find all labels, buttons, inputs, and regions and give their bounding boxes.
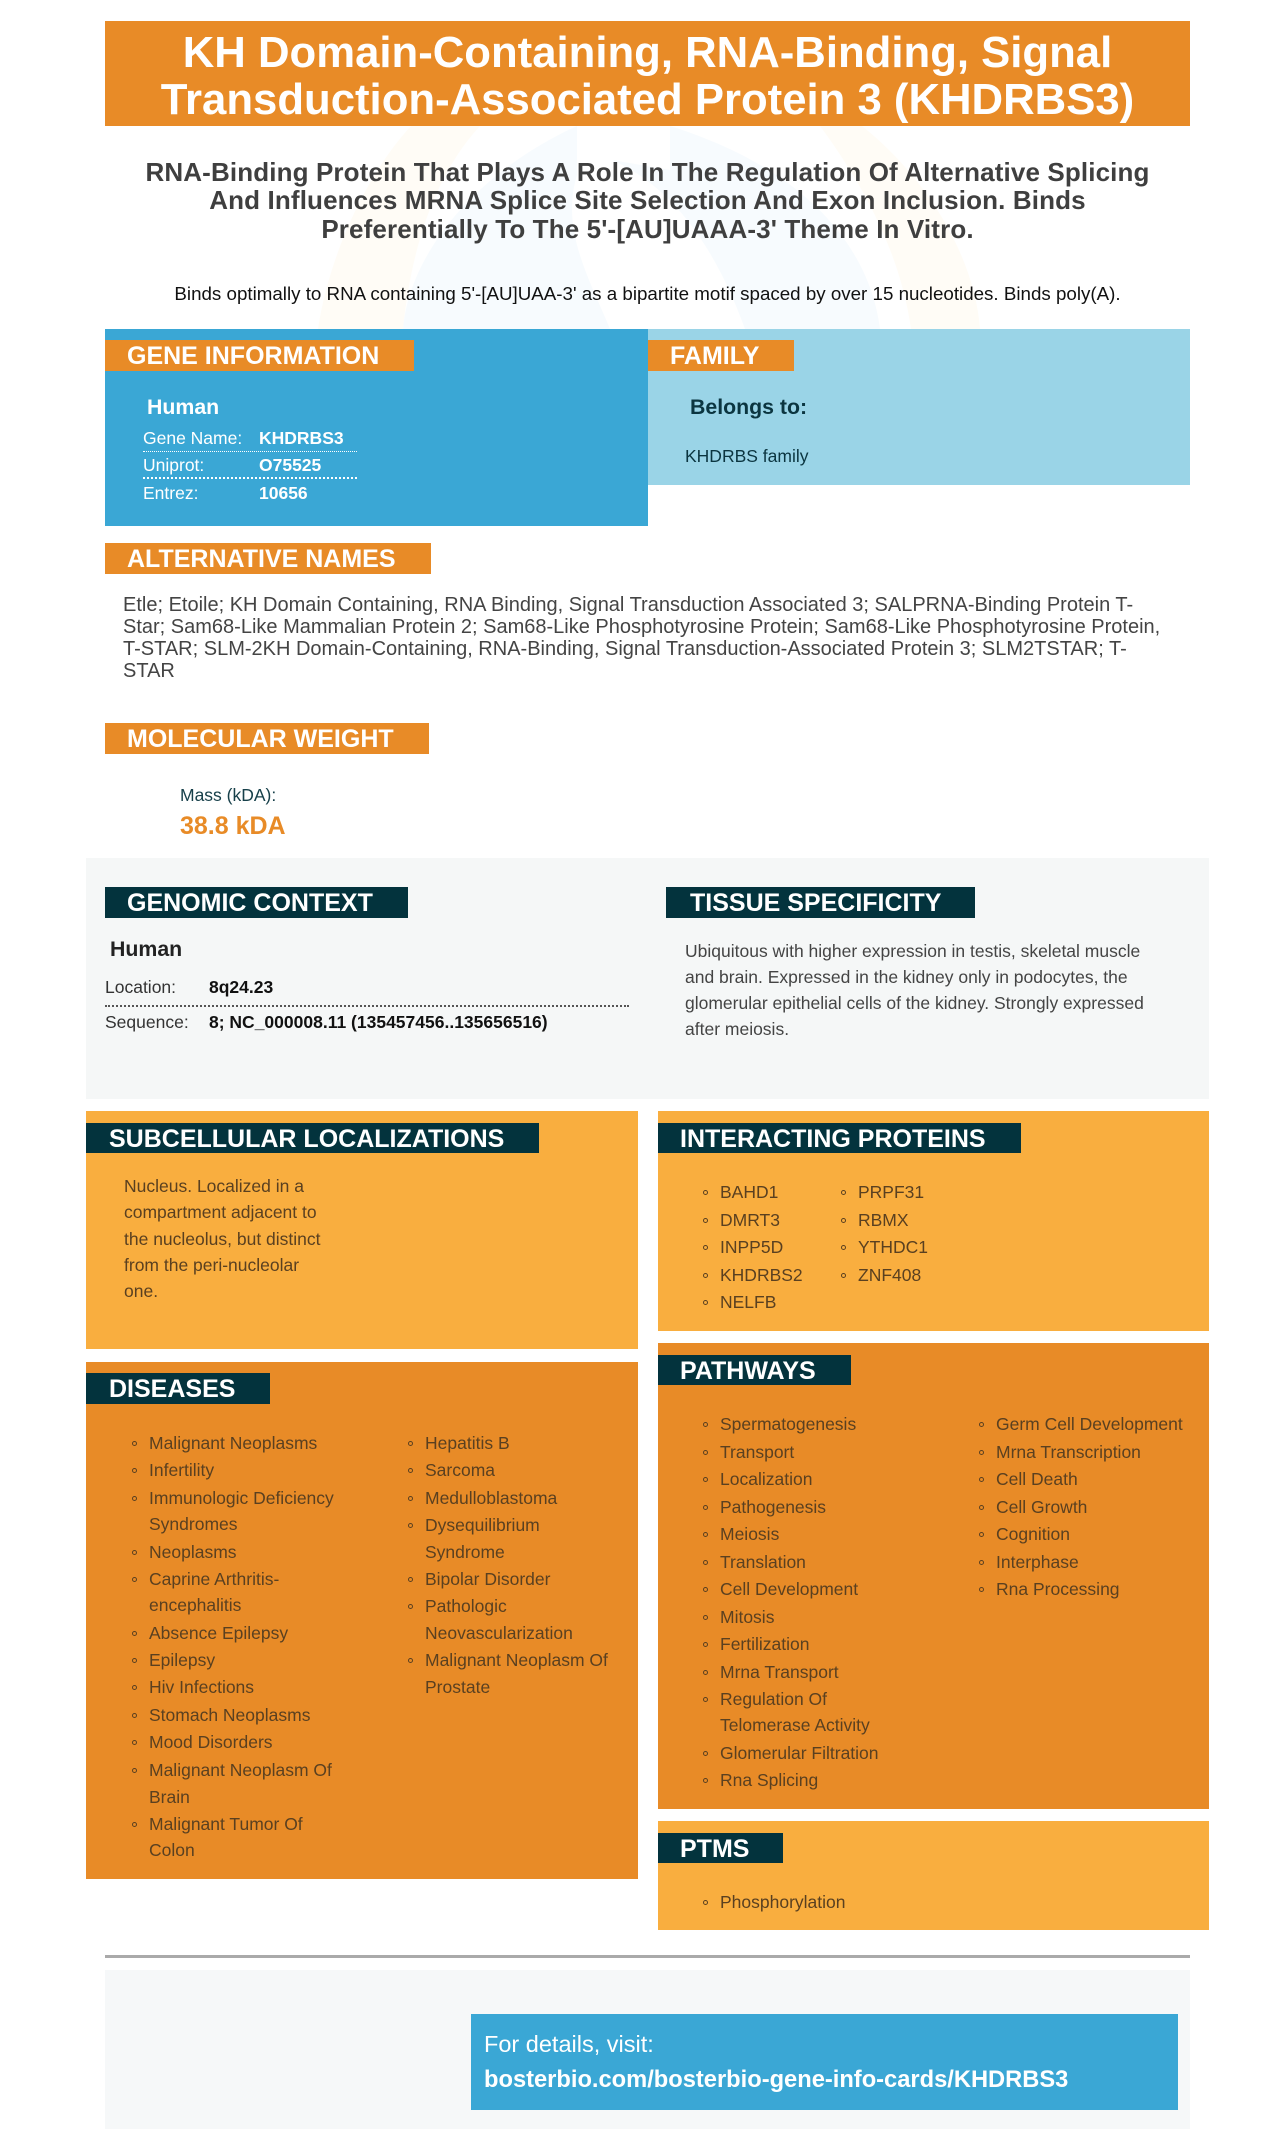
protein list: INPP5D [720,1237,783,1257]
pathway list: Transport [720,1442,794,1462]
heading: alternative names: ALTERNATIVE NAMES [127,545,396,573]
pathway list [703,1414,1183,1790]
description: Binds optimally to RNA containing 5'-[AU]UAA-3' as a bipartite motif spaced by over 15 nucleotides. Binds poly(A). [174,283,1121,304]
disease list: Hiv Infections [149,1677,254,1697]
heading: diseases: DISEASES [109,1375,235,1403]
pathway list: Localization [720,1469,812,1489]
panel: pathways [658,1343,1209,1809]
heading: gene information: GENE INFORMATION [127,342,379,370]
callout url: bosterbio.com/bosterbio-gene-info-cards/KHDRBS3 [484,2067,1068,2093]
pathway list: Fertilization [720,1634,809,1654]
protein list: KHDRBS2 [720,1265,803,1285]
pathway list: Cell Development [720,1579,858,1599]
pathway list: Spermatogenesis [720,1414,856,1434]
tissue specificity text: glomerular epithelial cells of the kidney. Strongly expressed [685,993,1144,1013]
title banner [105,21,1190,126]
disease list: Neoplasms [149,1542,237,1562]
pathway list: Rna Processing [996,1579,1120,1599]
panel: PTMs [658,1821,1209,1930]
alternative names text: Star; Sam68-Like Mammalian Protein 2; Sam68-Like Phosphotyrosine Protein; Sam68-Like Phosphotyrosine Protein, [123,616,1160,638]
panel: diseases [86,1362,638,1879]
panel: gene information [105,329,648,526]
disease list: Neovascularization [425,1623,573,1643]
protein list: NELFB [720,1292,776,1312]
pathway list: Pathogenesis [720,1497,826,1517]
pathway list: Translation [720,1552,806,1572]
heading: family [648,340,794,371]
localization text: the nucleolus, but distinct [124,1229,321,1249]
belongs to label: Belongs to: [690,395,807,419]
species label: Human [110,937,182,961]
background watermark [318,126,980,329]
uniprot row: Uniprot: [143,455,204,475]
uniprot row: O75525 [259,455,321,475]
protein list [703,1182,928,1312]
title line 2: Transduction-Associated Protein 3 (KHDRBS3) [161,75,1134,124]
callout label: For details, visit: [484,2031,654,2057]
tissue specificity text [685,941,1144,1039]
protein list: RBMX [858,1210,909,1230]
alternative names text: T-STAR; SLM-2KH Domain-Containing, RNA-Binding, Signal Transduction-Associated Protein 3; SLM2TSTAR; T- [123,638,1127,660]
tissue specificity text: after meiosis. [685,1019,789,1039]
heading: molecular weight: MOLECULAR WEIGHT [127,725,394,753]
location row: Location: [105,977,176,997]
PTM list: Phosphorylation [720,1892,846,1912]
entrez row [143,483,308,503]
entrez row: Entrez: [143,483,198,503]
details callout [471,2014,1178,2110]
disease list: Mood Disorders [149,1732,273,1752]
protein list: ZNF408 [858,1265,921,1285]
disease list: Stomach Neoplasms [149,1705,310,1725]
disease list: Colon [149,1840,195,1860]
disease list: Malignant Neoplasm Of [425,1650,608,1670]
mass label: Mass (kDA): [180,785,276,805]
pathway list: Cognition [996,1524,1070,1544]
pathway list: Mitosis [720,1607,774,1627]
subtitle [145,157,1150,244]
heading: PTMs: PTMS [680,1835,749,1863]
protein list: DMRT3 [720,1210,780,1230]
disease list: Malignant Neoplasm Of [149,1760,332,1780]
localization text: Nucleus. Localized in a [124,1176,304,1196]
localization text [124,1176,321,1301]
disease list: Medulloblastoma [425,1488,557,1508]
disease list: Prostate [425,1677,490,1697]
pathway list: Regulation Of [720,1689,827,1709]
pathway list: Telomerase Activity [720,1715,870,1735]
disease list: Syndrome [425,1542,505,1562]
disease list: Immunologic Deficiency [149,1488,334,1508]
sequence row: Sequence: [105,1012,189,1032]
subtitle: And Influences MRNA Splice Site Selection And Exon Inclusion. Binds [209,185,1086,215]
disease list: encephalitis [149,1595,241,1615]
disease list: Caprine Arthritis- [149,1569,279,1589]
location row: 8q24.23 [209,977,273,997]
family name: KHDRBS family [685,446,808,466]
disease list: Hepatitis B [425,1433,510,1453]
pathway list: Glomerular Filtration [720,1743,879,1763]
pathway list: Mrna Transport [720,1662,839,1682]
pathway list: Germ Cell Development [996,1414,1183,1434]
alternative names text [123,594,1160,682]
disease list: Epilepsy [149,1650,215,1670]
pathway list: Interphase [996,1552,1079,1572]
species label: Human [147,395,219,419]
pathway list: Cell Growth [996,1497,1087,1517]
disease list: Bipolar Disorder [425,1569,550,1589]
alternative names text: Etle; Etoile; KH Domain Containing, RNA Binding, Signal Transduction Associated 3; SALPRNA-Binding Protein T- [123,594,1133,616]
pathway list: Rna Splicing [720,1770,818,1790]
protein list: PRPF31 [858,1182,924,1202]
heading: diseases [86,1373,270,1404]
tissue specificity text: Ubiquitous with higher expression in testis, skeletal muscle [685,941,1140,961]
gene name row: Gene Name: [143,428,242,448]
heading: pathways [658,1355,851,1385]
heading: genomic context: GENOMIC CONTEXT [127,889,373,917]
gene name row: KHDRBS3 [259,428,344,448]
panel: family [648,329,1190,485]
disease list: Pathologic [425,1596,507,1616]
heading: tissue specificity: TISSUE SPECIFICITY [690,889,941,917]
location row [105,977,273,997]
mass value: 38.8 kDA [180,812,286,840]
footer panel [105,1970,1190,2129]
disease list: Sarcoma [425,1460,495,1480]
tissue specificity text: and brain. Expressed in the kidney only in podocytes, the [685,967,1128,987]
disease list: Syndromes [149,1514,238,1534]
localization text: compartment adjacent to [124,1202,317,1222]
disease list: Brain [149,1787,190,1807]
heading: subcellular localizations: SUBCELLULAR LOCALIZATIONS [109,1125,504,1153]
subtitle: RNA-Binding Protein That Plays A Role In The Regulation Of Alternative Splicing [145,157,1150,187]
panel: genomic context and tissue specificity [86,858,1209,1099]
localization text: from the peri-nucleolar [124,1255,299,1275]
entrez row: 10656 [259,483,308,503]
disease list: Infertility [149,1460,214,1480]
pathway list: Mrna Transcription [996,1442,1141,1462]
disease list: Dysequilibrium [425,1515,540,1535]
localization text: one. [124,1281,158,1301]
pathway list: Cell Death [996,1469,1078,1489]
disease list: Absence Epilepsy [149,1623,288,1643]
disease list: Malignant Neoplasms [149,1433,317,1453]
heading: pathways: PATHWAYS [680,1357,816,1385]
disease list: Malignant Tumor Of [149,1814,303,1834]
protein list: BAHD1 [720,1182,778,1202]
heading: PTMs [658,1833,783,1863]
title line 1: KH Domain-Containing, RNA-Binding, Signal [183,28,1112,77]
heading: interacting proteins: INTERACTING PROTEINS [680,1125,986,1153]
protein list: YTHDC1 [858,1237,928,1257]
panel: subcellular localizations [86,1111,638,1349]
pathway list: Meiosis [720,1524,779,1544]
disease list [132,1433,608,1860]
heading: family: FAMILY [670,342,759,370]
gene name row [143,428,344,448]
panel: interacting proteins [658,1111,1209,1331]
uniprot row [143,455,321,475]
sequence row: 8; NC_000008.11 (135457456..135656516) [209,1012,548,1032]
subtitle: Preferentially To The 5'-[AU]UAAA-3' Theme In Vitro. [321,214,974,244]
alternative names text: STAR [123,660,175,682]
